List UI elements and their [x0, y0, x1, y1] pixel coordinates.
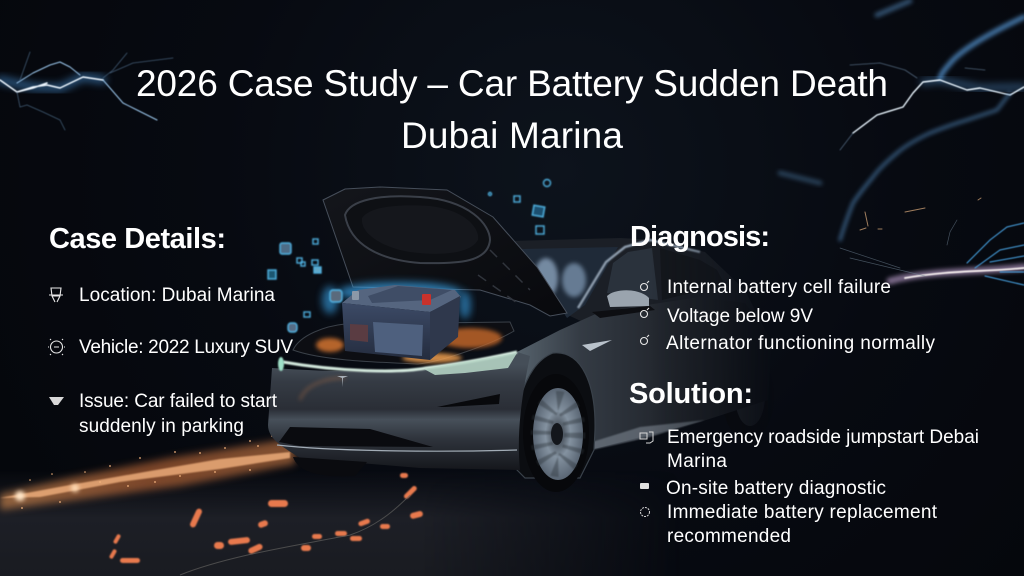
text: replacement: Immediate battery replacement: [667, 502, 938, 523]
a-pillar highlight: [578, 240, 700, 308]
car: main wheel: [530, 388, 586, 492]
icon: replacement: [640, 508, 650, 516]
lightning: top left: [0, 52, 173, 130]
car: door handle: [582, 340, 612, 351]
heading: diagnosis: Diagnosis:: [630, 221, 770, 253]
panel: diagnosis: [630, 221, 936, 354]
title: 2026 Case Study – Car Battery Sudden Death: [136, 63, 888, 104]
black terminal: [352, 291, 359, 300]
car: lower grille: [279, 427, 433, 447]
lightning: top right: [780, 1, 1024, 240]
car: front tyre left: [293, 457, 367, 465]
car: roof and glasshouse: [515, 238, 742, 320]
floating battery cubes: [268, 180, 550, 332]
icon: voltage: [640, 308, 649, 318]
car battery: [342, 285, 461, 360]
text: jumpstart continued: Marina: [667, 451, 727, 472]
text: jumpstart: Emergency roadside jumpstart Debai: [667, 427, 979, 448]
battery side face: [430, 296, 460, 360]
text: voltage: Voltage below 9V: [667, 306, 813, 327]
icon: location: [49, 288, 63, 302]
text: alternator: Alternator functioning normally: [666, 333, 936, 354]
car: bumper lip: [277, 445, 517, 451]
car: fog lamp: [437, 394, 500, 407]
car: side mirror: [592, 290, 655, 318]
wet ground: [0, 485, 577, 576]
car: [268, 187, 774, 492]
lightning: right horizontal burst: [840, 198, 1024, 285]
text: location: Location: Dubai Marina: [79, 285, 275, 306]
heading: case details: Case Details:: [49, 223, 226, 255]
battery front face: [342, 303, 430, 360]
text: issue: Issue: Car failed to start: [79, 391, 278, 412]
sparks: speckle: [21, 435, 273, 509]
text: diagnostic: On-site battery diagnostic: [666, 478, 886, 499]
icon: vehicle: [48, 339, 65, 355]
car: wheel arch: [515, 353, 595, 478]
text: vehicle: Vehicle: 2022 Luxury SUV: [79, 337, 293, 358]
text: internal cell: Internal battery cell failure: [667, 277, 891, 298]
car: hood underside: [323, 187, 567, 316]
text: issue continued: suddenly in parking: [79, 416, 244, 437]
title: Dubai Marina: [401, 115, 623, 156]
car: engine bay: [293, 322, 514, 364]
sparks: ground streak left: [0, 435, 424, 575]
icon: internal cell: [640, 281, 649, 290]
car: front fascia: [268, 352, 530, 470]
icon: jumpstart: [640, 432, 653, 443]
car: logo: [337, 376, 348, 387]
title: [136, 63, 888, 156]
car: headlight strip: [278, 352, 517, 375]
side windows: [607, 248, 658, 300]
windshield: [522, 247, 618, 318]
icon: alternator: [640, 335, 649, 344]
icon: issue: [49, 397, 64, 405]
car: rear wheel: [737, 405, 755, 426]
car: body side: [517, 303, 743, 449]
car: fascia reflection: [300, 378, 345, 400]
heading: solution: Solution:: [629, 378, 753, 410]
battery glow: [316, 282, 502, 363]
red terminal: [422, 294, 431, 305]
text: replacement continued: recommended: [667, 526, 791, 547]
sparks: scattered embers: [109, 473, 424, 563]
icon: diagnostic: [640, 483, 649, 489]
panel: solution: [629, 378, 979, 547]
panel: case details: [48, 223, 293, 437]
car: door sill highlight: [592, 420, 705, 450]
battery label: [373, 322, 423, 356]
